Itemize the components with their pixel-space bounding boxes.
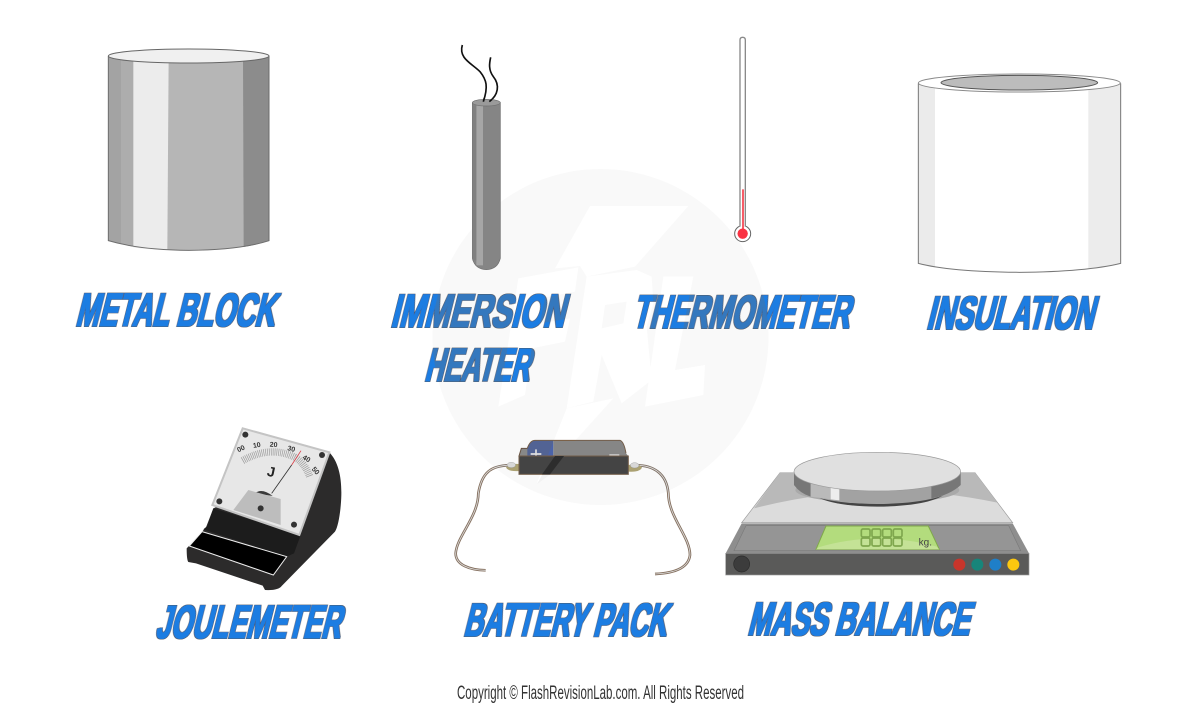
label: thermometer: THERMOMETER (629, 287, 859, 339)
icon: metal block cylinder (108, 49, 269, 250)
icon: joulemeter: J (266, 463, 277, 480)
icon: joulemeter: 40 (301, 454, 311, 464)
copyright footer: Copyright © FlashRevisionLab.com. All Rights Reserved (457, 683, 744, 704)
icon: joulemeter: 30 (286, 445, 296, 454)
label: immersion heater (387, 286, 574, 392)
icon: mass balance (726, 452, 1029, 575)
label: battery pack: BATTERY PACK (460, 595, 677, 647)
icon: joulemeter: 00 (236, 444, 246, 454)
watermark: FRL logo disc (432, 169, 768, 505)
label: joulemeter: JOULEMETER (152, 597, 350, 649)
icon: joulemeter: 50 (310, 466, 320, 477)
label: immersion heater: IMMERSION (387, 286, 574, 338)
icon: joulemeter (187, 428, 341, 590)
label: metal block: METAL BLOCK (72, 285, 285, 337)
watermark overlay dimming artwork inside disc (433, 294, 768, 474)
icon: insulation sleeve (918, 74, 1121, 272)
icon: thermometer (735, 37, 751, 242)
icon: immersion heater (462, 45, 500, 270)
label: mass balance: MASS BALANCE (744, 594, 979, 646)
icon: mass balance: kg. (919, 538, 932, 549)
label: immersion heater: HEATER (421, 340, 539, 392)
icon: joulemeter: 20 (270, 442, 278, 449)
icon: battery pack (456, 440, 690, 574)
icon: joulemeter: 10 (252, 442, 261, 450)
